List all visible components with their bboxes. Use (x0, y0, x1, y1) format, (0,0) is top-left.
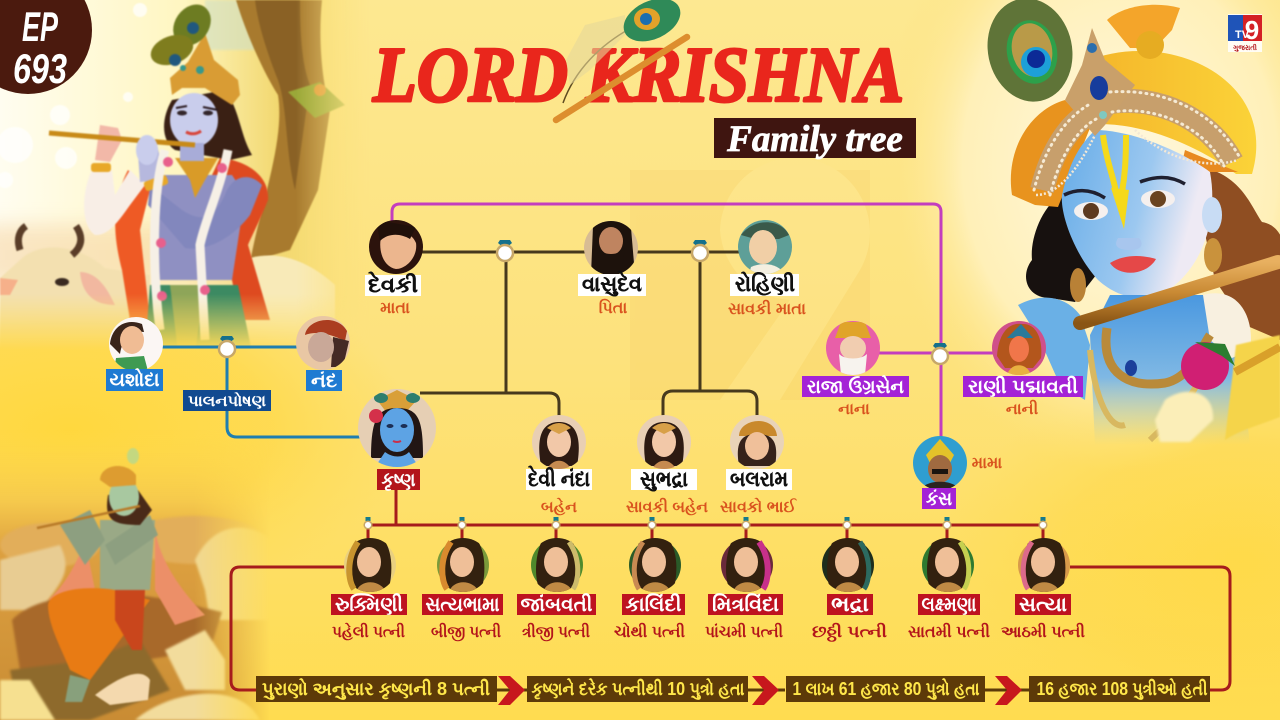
wife: Satya: આઠમી પત્ની (1001, 622, 1085, 641)
connector: maternal magenta line (392, 204, 1000, 440)
icon: flute (556, 37, 687, 120)
wife: Lakshmana: લક્ષ્મણા (922, 594, 977, 616)
person: Kans: મામા (972, 455, 1002, 472)
scarf shoulder right (205, 158, 270, 320)
tree (236, 0, 345, 262)
cow right (246, 254, 336, 344)
flute (37, 506, 140, 528)
person: Balram: સાવકો ભાઈ (720, 496, 798, 516)
person: Balram (720, 415, 798, 516)
wife: Satyabhama: બીજી પત્ની (431, 622, 501, 642)
fact strip (256, 676, 1210, 705)
person: Yashoda: યશોદા (110, 368, 160, 391)
jewelled headband (1034, 28, 1240, 195)
brows (1064, 177, 1185, 198)
background saturated glow right (940, 370, 1280, 720)
wife: Kalindi: ચોથી પત્ની (614, 621, 685, 641)
turban orange (1011, 100, 1090, 207)
face (170, 93, 218, 147)
nose (1116, 238, 1142, 250)
label: foster care (183, 390, 271, 411)
cow left (0, 226, 150, 352)
crown (170, 33, 240, 105)
flute (49, 133, 195, 145)
person: Devi Nanda (526, 415, 592, 516)
wife: Satyabhama: સત્યભામા (426, 594, 500, 616)
scarves (48, 530, 205, 625)
wife: Rukmini: પહેલી પત્ની (332, 621, 405, 641)
person: Devi Nanda: દેવી નંદા (528, 465, 590, 491)
label: foster care: પાલનપોષણ (188, 391, 266, 410)
person: Raja Ugrasen: નાના (838, 401, 870, 418)
connector: foster parents blue line (160, 347, 362, 437)
person: Subhadra (626, 415, 708, 516)
feathers (150, 4, 212, 67)
logo: TV9: TV (1235, 29, 1250, 41)
log (12, 594, 222, 670)
lips (1110, 256, 1156, 273)
wife: Lakshmana (908, 538, 990, 641)
background saturated glow left (0, 250, 410, 610)
near arm (148, 177, 262, 249)
person: Vasudev (578, 220, 646, 317)
head (107, 490, 152, 525)
necklace (1106, 328, 1210, 384)
dhoti (146, 284, 250, 346)
wife: Mitravinda: મિત્રવિંદા (712, 593, 779, 616)
connector: parents lines (420, 252, 757, 418)
hand (1018, 298, 1090, 400)
badge: episode number: EP (22, 3, 59, 50)
distant herd (0, 516, 240, 566)
hand (136, 135, 158, 165)
yellow cloth (1225, 335, 1280, 440)
person: Devaki (365, 220, 423, 317)
fact: daughters total (1029, 676, 1210, 702)
person: Raja Ugrasen: રાજા ઉગ્રસેન (807, 375, 904, 398)
person: Vasudev: પિતા (599, 298, 627, 317)
glow (900, 0, 1280, 500)
person: Rani Padmavati: નાની (1006, 399, 1039, 418)
connector: wives red frame (231, 490, 1230, 690)
illustration: large blue Krishna portrait (900, 0, 1280, 500)
earrings (1204, 238, 1222, 272)
torso (100, 520, 155, 590)
person: Rohini (728, 220, 806, 318)
wife: Satya (1001, 538, 1085, 641)
badge: episode number (0, 0, 92, 94)
person: Devaki: માતા (380, 300, 410, 317)
logo: TV9 (1228, 14, 1262, 52)
sky glow (0, 0, 370, 350)
white garland (1203, 293, 1251, 358)
turban yellow (1085, 51, 1256, 174)
fact: ten sons each: કૃષ્ણને દરેક પત્નીથી 10 પુત્રો હતા (532, 678, 745, 700)
flute (1080, 262, 1278, 323)
legs (48, 588, 150, 680)
wife: Rukmini: રુક્મિણી (335, 593, 403, 616)
subtitle: Family tree: Family tree (726, 119, 903, 160)
wife: Rukmini (331, 538, 407, 641)
peacock feather (978, 0, 1082, 110)
wife: Kalindi (614, 538, 685, 641)
logo: TV9: 9 (1245, 15, 1259, 45)
person: Subhadra: સુભદ્રા (640, 468, 688, 492)
person: Rani Padmavati: રાણી પદ્માવતી (968, 376, 1079, 398)
neck and chest (1090, 295, 1250, 445)
cow right (194, 527, 262, 621)
wife: Lakshmana: સાતમી પત્ની (908, 622, 990, 641)
arrow (995, 676, 1022, 705)
person: Rohini: રોહિણી (735, 271, 795, 296)
logo: TV9: ગુજરાતી (1233, 43, 1257, 52)
arrow (498, 676, 525, 705)
person: Kans: કંસ (926, 488, 952, 510)
red scarf left (115, 170, 150, 320)
person: Devi Nanda: બહેન (541, 496, 577, 516)
bokeh (0, 3, 147, 188)
person: Krishna (358, 389, 436, 491)
hair left (1026, 195, 1100, 302)
wife: Mitravinda (705, 538, 783, 641)
face (1062, 130, 1212, 298)
cow bottom (135, 630, 260, 720)
person: Yashoda (106, 317, 163, 391)
calf (95, 674, 150, 705)
person: Raja Ugrasen (802, 321, 909, 418)
arrow (752, 676, 779, 705)
tilak (1103, 135, 1129, 229)
turban knot (1136, 31, 1164, 59)
person: Nand: નંદ (311, 370, 337, 392)
watermark logo (630, 158, 870, 400)
person: Rohini: સાવકી માતા (728, 299, 806, 318)
fact: sons total: 1 લાખ 61 હજાર 80 પુત્રો હતા (792, 678, 980, 700)
person: Nand (296, 316, 350, 392)
torso (155, 175, 245, 280)
person: Vasudev: વાસુદેવ (582, 270, 642, 297)
fact: eight wives: પુરાણો અનુસાર કૃષ્ણની 8 પત્ની (262, 678, 490, 700)
illustration: flute-playing Krishna with cows (0, 0, 370, 352)
hair (164, 90, 252, 160)
title (372, 0, 904, 120)
title: LORD KRISHNA (372, 31, 904, 118)
hair right (1190, 165, 1280, 340)
fact: sons total (786, 676, 985, 702)
illustration: seated Krishna among cows (0, 448, 262, 720)
person: Krishna: કૃષ્ણ (382, 470, 416, 491)
foot (65, 675, 90, 702)
person: Devaki: દેવકી (368, 271, 418, 297)
turban fan (1107, 5, 1180, 48)
necklace (175, 158, 218, 198)
wife: Bhadra: ભદ્રા (831, 594, 869, 616)
wife: Satyabhama (422, 538, 503, 642)
wife: Jambavati: જાંબવતી (520, 593, 593, 616)
fact: daughters total: 16 હજાર 108 પુત્રીઓ હતી (1036, 678, 1208, 700)
wife: Kalindi: કાલિંદી (626, 593, 682, 616)
wife: Bhadra (812, 538, 887, 642)
person: Rani Padmavati (963, 321, 1083, 418)
wife: Bhadra: છઠ્ઠી પત્ની (812, 622, 887, 642)
wife: Jambavati (517, 538, 596, 642)
wife: Jambavati: ત્રીજી પત્ની (522, 622, 590, 642)
arms (60, 510, 158, 565)
icon: peacock feather (563, 0, 687, 103)
badge: episode number: 693 (13, 45, 67, 92)
person: Kans (913, 436, 1002, 510)
wife: Satya: સત્યા (1019, 594, 1067, 616)
rings (219, 240, 1047, 529)
person: Subhadra: સાવકી બહેન (626, 496, 708, 516)
wife: Mitravinda: પાંચમી પત્ની (705, 622, 783, 641)
garland (155, 150, 228, 340)
eyes (1074, 202, 1108, 220)
flower (1181, 342, 1229, 390)
cow left (0, 545, 66, 610)
far arm (84, 170, 145, 235)
person: Balram: બલરામ (730, 468, 788, 491)
ear (1202, 197, 1222, 233)
pearl strand (1036, 130, 1238, 195)
